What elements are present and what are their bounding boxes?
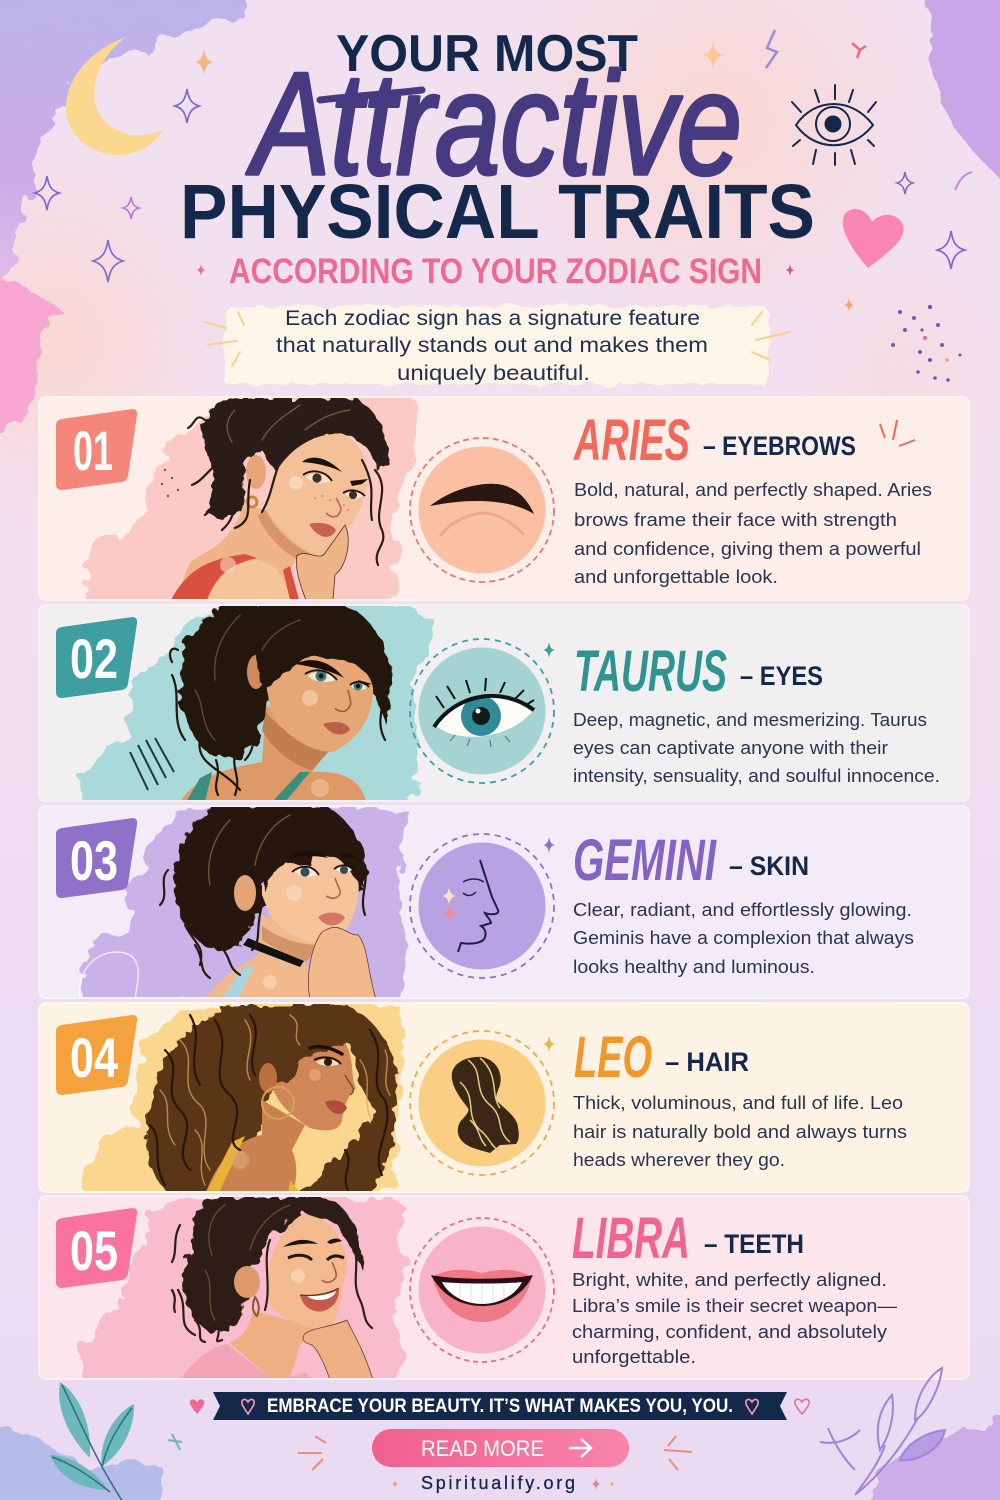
body text: aries: brows frame their face with strength — [574, 509, 897, 530]
ribbon: tagline: EMBRACE YOUR BEAUTY. IT’S WHAT MAKES YOU, YOU. — [267, 1396, 733, 1417]
intro banner: uniquely beautiful. — [397, 362, 590, 385]
panel: taurus — [39, 603, 969, 810]
body text: taurus: eyes can captivate anyone with their — [573, 737, 888, 758]
body text: aries: and unforgettable look. — [574, 566, 778, 587]
title: Attractive — [246, 42, 742, 205]
number badge 02 — [56, 617, 137, 698]
icon: glowing skin profile — [410, 834, 555, 978]
number badge 03: 03 — [70, 829, 118, 892]
intro banner: Each zodiac sign has a signature feature — [285, 307, 700, 330]
number badge 04 — [56, 1015, 137, 1095]
number badge 02: 02 — [70, 627, 118, 690]
body text: libra: Bright, white, and perfectly aligned. — [572, 1269, 887, 1290]
heading: leo hair: – HAIR — [665, 1047, 749, 1077]
ribbon: tagline — [190, 1392, 809, 1420]
icon: crescent moon — [66, 37, 163, 155]
heading: aries eyebrows — [573, 408, 915, 473]
body text: aries: and confidence, giving them a powerful — [574, 538, 921, 559]
body text: leo — [573, 1092, 907, 1170]
icon: wavy hair — [410, 1031, 555, 1175]
body text: leo: hair is naturally bold and always turns — [573, 1121, 907, 1142]
heading: gemini skin: GEMINI — [573, 828, 717, 893]
icon: eyebrow — [410, 438, 554, 582]
title: YOUR MOST — [336, 25, 638, 83]
heading: aries eyebrows: ARIES — [573, 408, 690, 473]
heading: taurus eyes: TAURUS — [574, 639, 727, 704]
body text: libra: unforgettable. — [572, 1346, 696, 1367]
number badge 05: 05 — [70, 1219, 118, 1282]
title: ACCORDING TO YOUR ZODIAC SIGN — [229, 252, 762, 291]
number badge 01: 01 — [73, 419, 113, 482]
body text: gemini: Geminis have a complexion that always — [573, 927, 914, 948]
body text: taurus: Deep, magnetic, and mesmerizing. Taurus — [573, 709, 927, 730]
body text: libra: charming, confident, and absolutely — [572, 1321, 888, 1342]
panel: gemini — [39, 801, 969, 1005]
hair — [184, 1197, 363, 1335]
icon: eye — [410, 639, 555, 783]
icon: smile with teeth — [410, 1218, 554, 1362]
heading: taurus eyes: – EYES — [740, 661, 823, 691]
heading: libra teeth: LIBRA — [572, 1206, 690, 1271]
footer brand: Spiritualify.org — [421, 1473, 575, 1493]
body text: leo: heads wherever they go. — [573, 1149, 785, 1170]
button: read more: READ MORE — [421, 1436, 544, 1461]
number badge 05 — [56, 1208, 137, 1288]
number badge 01 — [56, 409, 137, 490]
footer brand — [392, 1473, 614, 1493]
hair — [200, 398, 388, 522]
body text: taurus — [573, 709, 940, 786]
heading: gemini skin: – SKIN — [729, 851, 809, 881]
body text: gemini: Clear, radiant, and effortlessly glowing. — [573, 899, 912, 920]
hair — [174, 805, 367, 950]
heading: libra teeth: – TEETH — [704, 1229, 804, 1259]
body text: libra — [572, 1269, 898, 1367]
decorative sparkles — [35, 30, 972, 382]
panel: leo — [39, 1001, 969, 1200]
body text: gemini: looks healthy and luminous. — [573, 956, 815, 977]
body text: aries — [574, 479, 932, 587]
heading: leo hair: LEO — [574, 1025, 652, 1090]
hair — [145, 1005, 398, 1195]
number badge 03 — [56, 818, 137, 898]
body text: aries: Bold, natural, and perfectly shaped. Aries — [574, 479, 932, 500]
heading: aries eyebrows: – EYEBROWS — [703, 431, 856, 461]
intro banner — [205, 306, 790, 385]
icon: teal leaves — [50, 1382, 182, 1500]
title — [180, 25, 815, 291]
intro banner: that naturally stands out and makes them — [276, 334, 708, 357]
icon: purple botanical sprig — [820, 1368, 945, 1495]
heading: leo hair — [574, 1025, 749, 1090]
button: read more — [298, 1429, 692, 1470]
body text: taurus: intensity, sensuality, and soulful innocence. — [573, 765, 940, 786]
icon: all-seeing eye — [792, 85, 876, 165]
body text: libra: Libra’s smile is their secret weapon— — [572, 1295, 898, 1316]
body text: gemini — [573, 899, 914, 977]
panel: aries — [39, 391, 969, 610]
hair — [179, 604, 392, 760]
icon: pink heart — [843, 209, 904, 268]
number badge 04: 04 — [70, 1026, 118, 1089]
body text: leo: Thick, voluminous, and full of life. Leo — [573, 1092, 903, 1113]
title: PHYSICAL TRAITS — [180, 169, 815, 255]
panel: libra — [39, 1194, 969, 1385]
